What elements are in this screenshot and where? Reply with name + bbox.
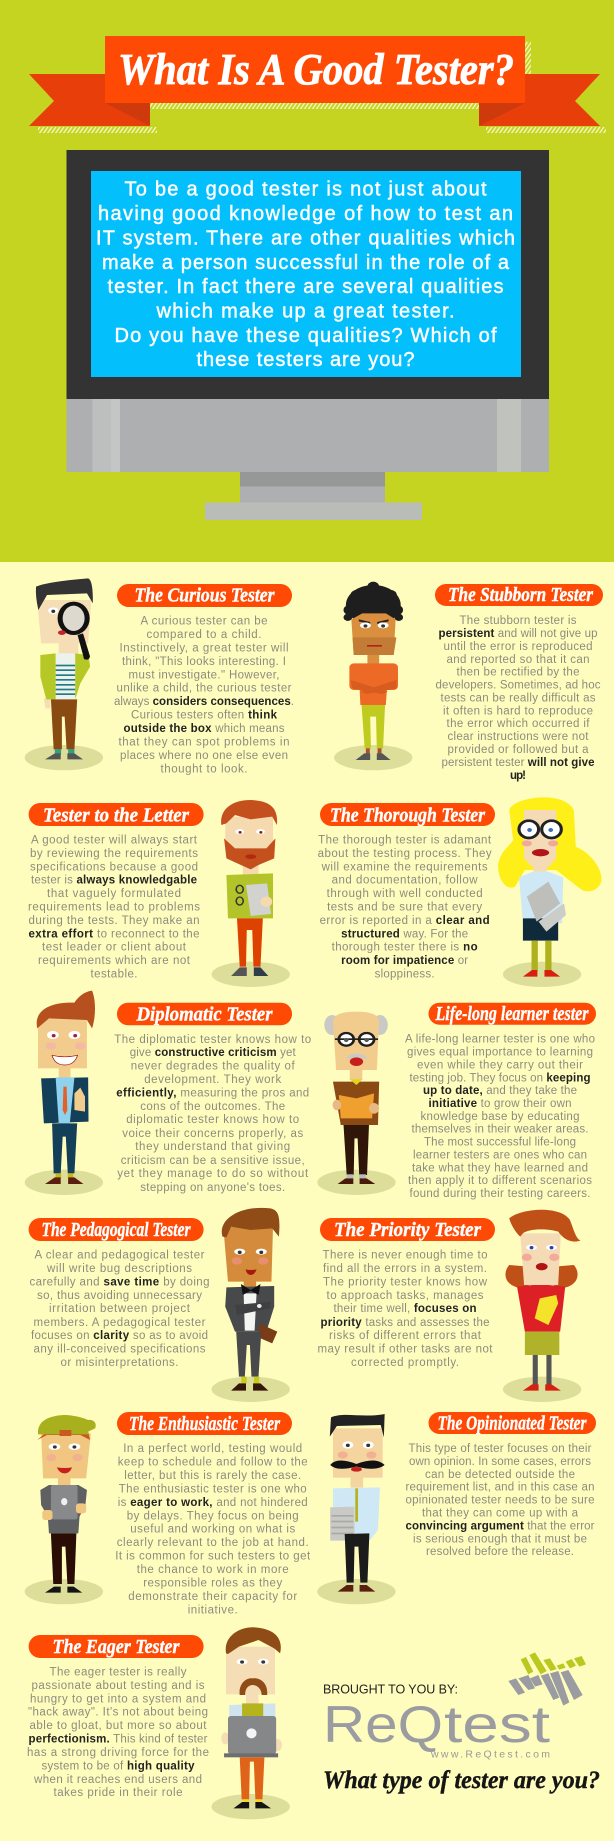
body text: "hack away". It's not about being: [28, 1707, 208, 1719]
panel: Tester to the Letter: [28, 800, 290, 987]
body text: so, thus avoiding unnecessary: [37, 1290, 202, 1302]
body text: provided or followed but a: [448, 744, 589, 756]
body text: clearly relevant to the job at hand.: [117, 1537, 309, 1549]
intro text on monitor screen: Do you have these qualities? Which of: [114, 325, 497, 347]
body text: system to be of high quality: [42, 1760, 195, 1772]
body text: until the error is reproduced: [444, 641, 592, 653]
body text: The eager tester is really: [50, 1666, 187, 1678]
body text: The most successful life-long: [424, 1137, 576, 1149]
body text: and reported so that it can: [446, 654, 590, 666]
body text: keep to schedule and follow to the: [118, 1456, 308, 1468]
body text: then apply it to different scenarios: [408, 1175, 592, 1187]
body text: [115, 1443, 311, 1617]
body text: learner testers are ones who can: [413, 1150, 587, 1162]
body text: or misinterpretations.: [60, 1357, 178, 1369]
body text: carefully and save time by doing: [30, 1276, 210, 1288]
body text: is serious enough that it must be: [413, 1533, 587, 1545]
panel: The Priority Tester: [318, 1210, 581, 1402]
body text: unlike a child, the curious tester: [116, 683, 292, 695]
body text: by reviewing the requirements: [30, 848, 198, 860]
closing question: What type of tester are you?: [323, 1767, 600, 1794]
intro text on monitor screen: make a person successful in the role of a: [102, 252, 510, 274]
body text: give constructive criticism yet: [130, 1047, 296, 1059]
heading pill: The Thorough Tester: [330, 804, 485, 826]
figure: diplomatic tester in suit with thumbs up: [25, 991, 103, 1195]
body text: letter, but this is rarely the case.: [124, 1470, 301, 1482]
body text: specifications because a good: [30, 861, 198, 873]
heading pill: Diplomatic Tester: [136, 1004, 273, 1026]
body text: focuses on clarity so as to avoid: [31, 1330, 208, 1342]
body text: that they can come up with a: [422, 1508, 579, 1520]
body text: found during their testing careers.: [410, 1188, 590, 1200]
intro text on monitor screen: To be a good tester is not just about: [124, 178, 487, 200]
body text: The thorough tester is adamant: [318, 834, 492, 846]
background: green header section: [0, 0, 614, 562]
panel: The Opinionated Tester: [317, 1412, 596, 1604]
intro text on monitor screen: these testers are you?: [196, 349, 414, 371]
body text: themselves in their weaker areas.: [412, 1124, 588, 1136]
heading pill: Tester to the Letter: [43, 804, 189, 826]
body text: any ill-conceived specifications: [34, 1344, 206, 1356]
body text: [114, 1034, 311, 1194]
figure: stubborn tester with crossed arms: [334, 582, 412, 770]
body text: [27, 1666, 209, 1799]
body text: able to gloat, but more so about: [30, 1720, 207, 1732]
panel: The Pedagogical Tester: [29, 1208, 290, 1402]
intro text on monitor screen: which make up a great tester.: [156, 300, 454, 322]
body text: [406, 1443, 595, 1558]
body text: to approach tasks, manages: [326, 1290, 484, 1302]
body text: by delays. They focus on being: [127, 1510, 299, 1522]
body text: up to date, and they take the: [423, 1085, 577, 1097]
body text: thorough tester there is no: [332, 942, 478, 954]
body text: priority tasks and assesses the: [320, 1317, 490, 1329]
heading pill: The Pedagogical Tester: [42, 1219, 191, 1241]
body text: even while they carry out their: [417, 1059, 583, 1071]
body text: [436, 615, 601, 782]
body text: through with well conducted: [327, 888, 483, 900]
monitor illustration: [66, 150, 549, 520]
body text: criticism can be a sensitive issue,: [121, 1155, 305, 1167]
logo url: www.ReQtest.com: [430, 1748, 550, 1760]
body text: [405, 1034, 595, 1200]
body text: perfectionism. This kind of tester: [28, 1734, 208, 1746]
body text: will examine the requirements: [321, 861, 488, 873]
figure: tester in tuxedo checking watch: [212, 1208, 290, 1402]
body text: has a strong driving force for the: [27, 1747, 209, 1759]
body text: take what they have learned and: [412, 1162, 588, 1174]
heading pill: The Stubborn Tester: [448, 584, 593, 606]
body text: initiative to grow their own: [428, 1098, 572, 1110]
body text: up!: [510, 770, 526, 782]
figure: blonde tester with glasses and papers: [498, 797, 601, 987]
label: brought to you by: BROUGHT TO YOU BY:: [323, 1682, 458, 1696]
body text: The priority tester knows how: [323, 1276, 488, 1288]
body text: developers. Sometimes, ad hoc: [436, 680, 601, 692]
body text: diplomatic tester knows how to: [126, 1114, 299, 1126]
body text: useful and working on what is: [130, 1524, 295, 1536]
body text: and documentation, follow: [332, 875, 478, 887]
body text: always considers consequences.: [114, 696, 294, 708]
body text: find all the errors in a system.: [323, 1263, 487, 1275]
body text: [318, 834, 492, 980]
logo wordmark: ReQ: [323, 1696, 443, 1754]
body text: may result if other tasks are not: [318, 1344, 493, 1356]
body text: tests can be really difficult as: [440, 692, 596, 704]
body text: compared to a child.: [146, 629, 262, 641]
body text: In a perfect world, testing would: [123, 1443, 302, 1455]
body text: is eager to work, and not hindered: [118, 1497, 308, 1509]
body text: responsible roles as they: [143, 1578, 282, 1590]
body text: their time well, focuses on: [334, 1303, 476, 1315]
body text: outside the box which means: [124, 723, 285, 735]
heading pill: The Curious Tester: [134, 584, 275, 606]
heading pill: The Eager Tester: [52, 1636, 180, 1658]
body text: The stubborn tester is: [460, 615, 577, 627]
panel: The Enthusiastic Tester: [25, 1412, 311, 1617]
body text: requirements lead to problems: [28, 902, 200, 914]
body text: Curious testers often think: [131, 710, 278, 722]
body text: testable.: [90, 968, 138, 980]
figure: bearded tester with document: [212, 800, 290, 987]
body text: irritation between project: [49, 1303, 191, 1315]
body text: The diplomatic tester knows how to: [114, 1034, 311, 1046]
body text: It is common for such testers to get: [115, 1551, 311, 1563]
figure: bald tester reading a book: [317, 1012, 396, 1195]
body text: [318, 1250, 493, 1369]
heading pill: The Priority Tester: [334, 1219, 481, 1241]
panel: The Eager Tester: [27, 1627, 290, 1819]
body text: knowledge base by educating: [420, 1111, 580, 1123]
body text: places where no one else even: [120, 750, 288, 762]
body text: then be rectified by the: [456, 666, 580, 678]
figure: tester in cap holding a tablet: [25, 1415, 103, 1604]
body text: The enthusiastic tester is one who: [119, 1483, 307, 1495]
panel: The Curious Tester: [25, 578, 294, 775]
body text: persistent and will not give up: [438, 628, 598, 640]
intro text on monitor screen: tester. In fact there are several qualities: [108, 276, 504, 298]
body text: A curious tester can be: [140, 616, 268, 628]
body text: during the tests. They make an: [28, 915, 200, 927]
body text: own opinion. In some cases, errors: [409, 1456, 591, 1468]
body text: resolved before the release.: [426, 1546, 574, 1558]
body text: gives equal importance to learning: [407, 1046, 593, 1058]
body text: [28, 834, 200, 980]
body text: about the testing process. They: [318, 848, 492, 860]
body text: convincing argument that the error: [406, 1520, 595, 1532]
body text: clear instructions were not: [448, 731, 589, 743]
body text: it often is hard to reproduce: [443, 706, 593, 718]
body text: members. A pedagogical tester: [34, 1317, 206, 1329]
body text: demonstrate their capacity for: [128, 1591, 297, 1603]
body text: There is never enough time to: [322, 1250, 488, 1262]
body text: requirement list, and in this case an: [406, 1482, 594, 1494]
body text: tester is always knowledgable: [31, 875, 197, 887]
body text: thought to look.: [160, 763, 248, 775]
body text: A good tester will always start: [31, 834, 198, 846]
intro text on monitor screen: IT system. There are other qualities which: [96, 228, 515, 250]
figure: tester with moustache holding a document: [317, 1414, 396, 1604]
figure: curious tester with magnifying glass: [25, 578, 103, 770]
body text: A clear and pedagogical tester: [34, 1250, 205, 1262]
body text: takes pride in their role: [54, 1787, 182, 1799]
body text: voice their concerns properly, as: [122, 1128, 303, 1140]
body text: test leader or client about: [42, 942, 187, 954]
body text: yet they manage to do so without: [117, 1168, 309, 1180]
figure: red-haired tester with notepad: [503, 1210, 581, 1402]
body text: opinionated tester needs to be sure: [406, 1495, 594, 1507]
body text: development. They work: [144, 1074, 281, 1086]
body text: initiative.: [188, 1605, 238, 1617]
panel: The Thorough Tester: [318, 797, 601, 987]
body text: stepping on anyone's toes.: [140, 1182, 285, 1194]
figure: tester with moustache and laptop: [212, 1627, 290, 1819]
body text: will write bug descriptions: [46, 1263, 192, 1275]
heading pill: The Enthusiastic Tester: [129, 1413, 280, 1435]
body text: the chance to work in more: [137, 1564, 289, 1576]
panel: The Stubborn Tester: [334, 582, 603, 782]
body text: when it reaches end users and: [33, 1774, 202, 1786]
body text: hungry to get into a system and: [30, 1693, 206, 1705]
ReQtest logo block: [323, 1652, 586, 1760]
title banner: [29, 36, 606, 133]
logo wordmark: [323, 1696, 551, 1754]
logo wordmark: test: [444, 1696, 551, 1754]
body text: think, "This looks interesting. I: [122, 656, 286, 668]
body text: can be detected outside the: [425, 1469, 575, 1481]
body text: persistent tester will not give: [442, 757, 594, 769]
panel: Life-long learner tester: [317, 1003, 596, 1200]
body text: structured way. For the: [341, 928, 468, 940]
body text: efficiently, measuring the pros and: [116, 1088, 309, 1100]
body text: the error which occurred if: [446, 718, 590, 730]
title text: What Is A Good Tester?: [118, 45, 514, 94]
body text: Instinctively, a great tester will: [120, 642, 288, 654]
body text: requirements which are not: [38, 955, 191, 967]
body text: corrected promptly.: [351, 1357, 459, 1369]
body text: tests and be sure that every: [327, 902, 482, 914]
body text: must investigate." However,: [128, 669, 280, 681]
body text: [114, 616, 294, 775]
body text: never degrades the quality of: [131, 1060, 295, 1072]
body text: This type of tester focuses on their: [408, 1443, 592, 1455]
body text: error is reported in a clear and: [320, 915, 490, 927]
body text: that vaguely formulated: [47, 888, 181, 900]
body text: testing job. They focus on keeping: [410, 1072, 590, 1084]
logo mark: tilted bars: [508, 1652, 586, 1706]
body text: [30, 1250, 210, 1369]
body text: extra effort to reconnect to the: [28, 928, 200, 940]
body text: risks of different errors that: [329, 1330, 482, 1342]
intro text on monitor screen: having good knowledge of how to test an: [98, 203, 513, 225]
body text: that they can spot problems in: [118, 736, 290, 748]
panel: Diplomatic Tester: [25, 991, 311, 1195]
body text: room for impatience or: [341, 955, 468, 967]
body text: passionate about testing and is: [32, 1680, 205, 1692]
intro text on monitor screen: [96, 178, 515, 371]
body text: A life-long learner tester is one who: [405, 1034, 595, 1046]
body text: sloppiness.: [375, 968, 435, 980]
body text: cons of the outcomes. The: [140, 1101, 285, 1113]
body text: they understand that giving: [135, 1141, 290, 1153]
